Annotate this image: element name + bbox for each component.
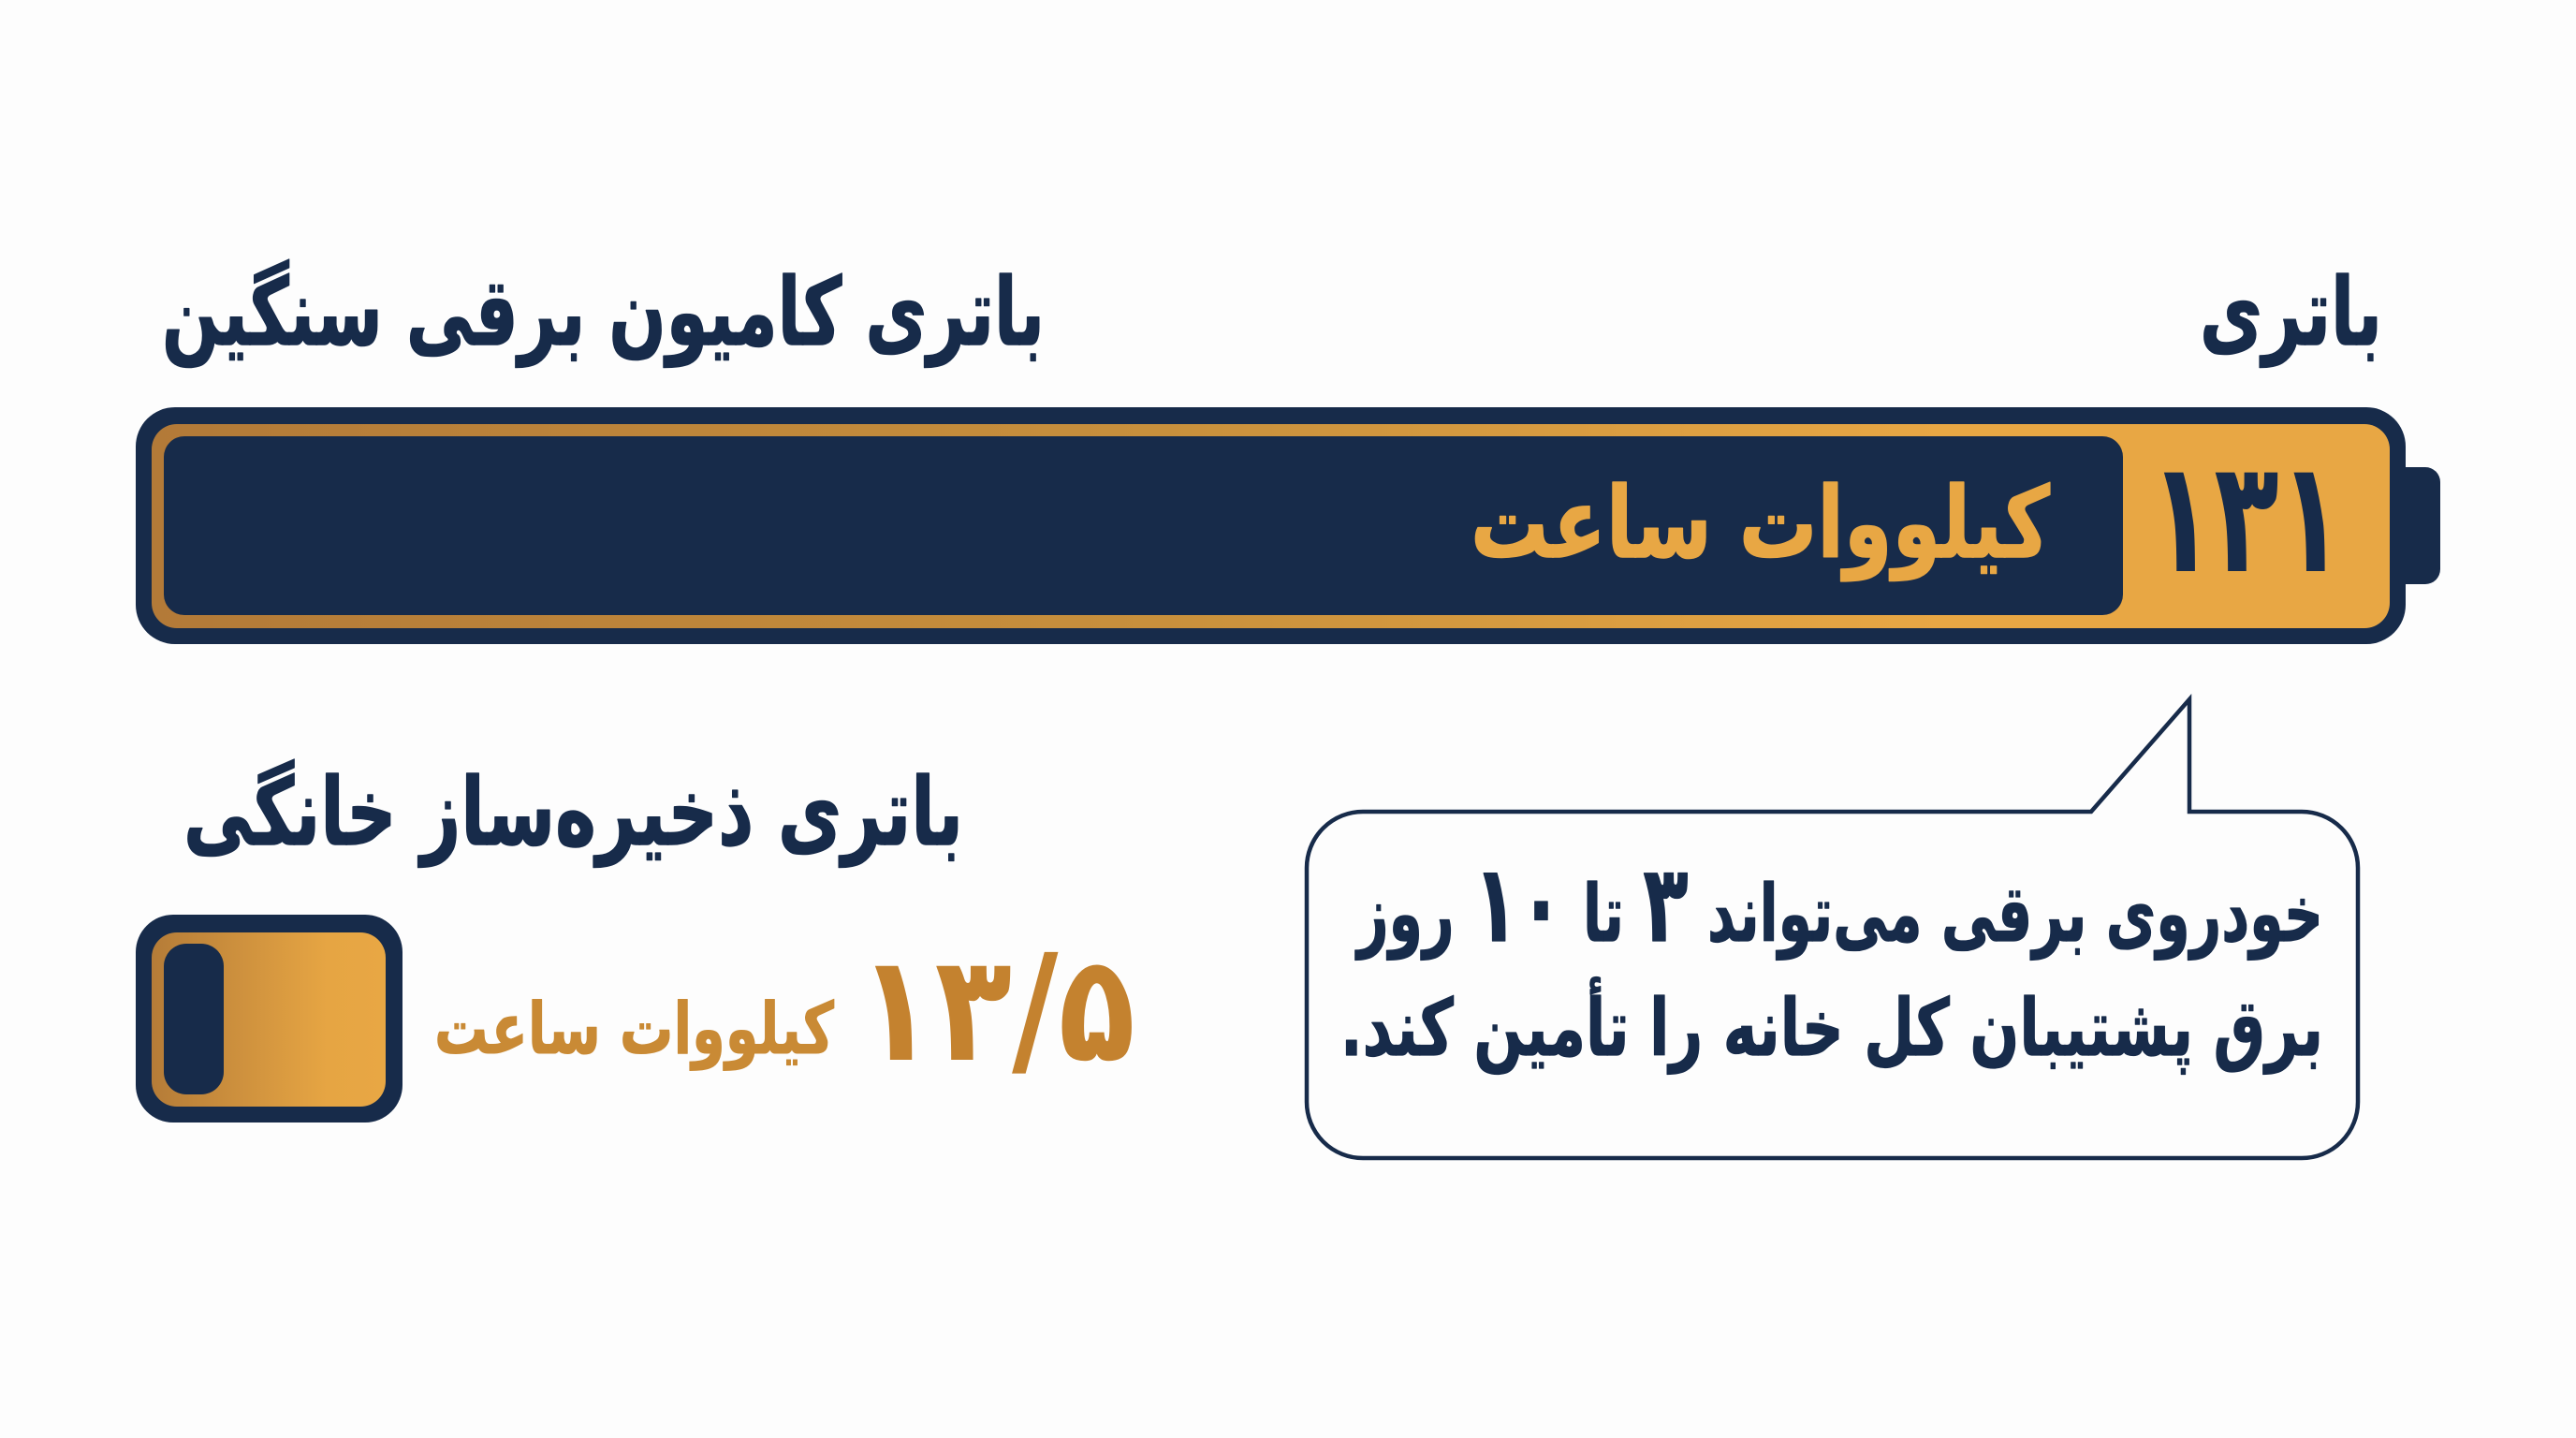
heading: home storage battery: باتری ذخیره‌ساز خانگی: [183, 757, 963, 868]
callout speech bubble: [1307, 699, 2358, 1158]
casing: [136, 915, 402, 1123]
large battery: [136, 407, 2440, 644]
navy level marker: [164, 944, 224, 1094]
callout line 1: خودروی برقی می‌تواند ۳ تا ۱۰ روز: [1354, 842, 2323, 966]
battery terminal: [2387, 467, 2440, 584]
value: 131: ۱۳۱: [2149, 428, 2344, 609]
value: 13.5: ۱۳/۵: [857, 923, 1135, 1095]
amber charge fill: [152, 424, 2390, 628]
battery casing: [136, 407, 2406, 644]
navy capacity panel: [164, 436, 2123, 615]
callout text: [1340, 842, 2323, 1075]
heading: heavy electric truck battery: باتری کامیون برقی سنگین: [162, 257, 1045, 368]
amber fill: [152, 932, 386, 1107]
label: battery: باتری: [2200, 257, 2382, 368]
unit label: kilowatt-hours small: کیلووات ساعت: [434, 987, 835, 1071]
small battery icon: [136, 915, 402, 1123]
unit label: kilowatt-hours: کیلووات ساعت: [1471, 466, 2051, 581]
